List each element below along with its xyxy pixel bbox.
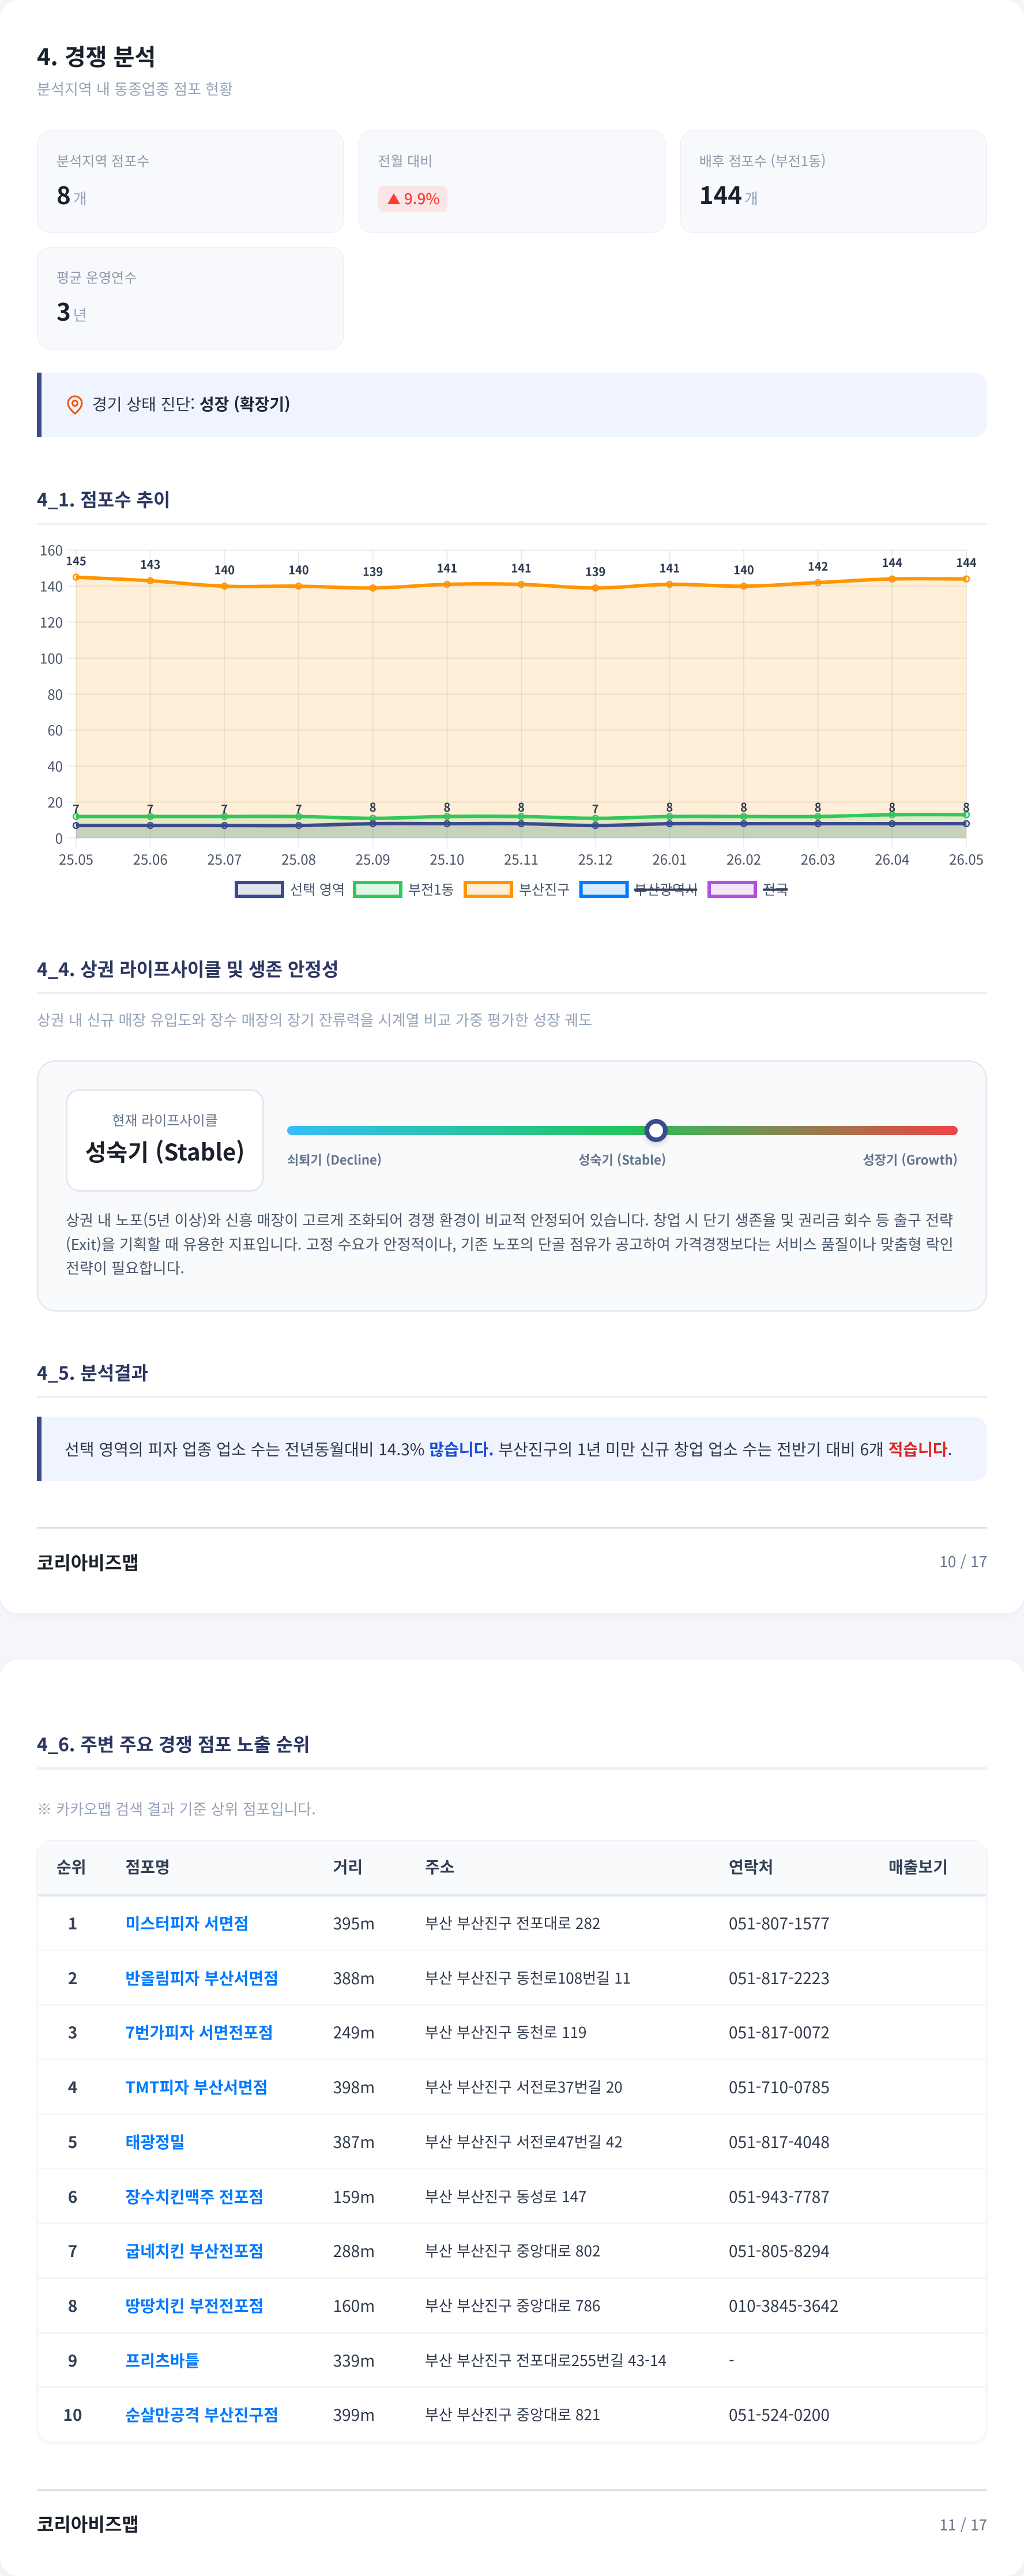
callout: analysis result: 선택 영역의 피자 업종 업소 수는 전년동월대비 14.3% 많습니다. 부산진구의 1년 미만 신규 창업 업소 수는 전반기 대비 6개 적습니다. (65, 1437, 952, 1460)
row 9: 부산 부산진구 전포대로255번길 43-14 (425, 2349, 667, 2371)
row 8: 010-3845-3642 (729, 2294, 838, 2317)
stat card: average years: 3년 (57, 293, 87, 328)
page number: 10 / 17 (940, 1550, 987, 1572)
y axis labels: 40 (47, 756, 63, 776)
data labels: 8 (666, 798, 673, 815)
table header: 순위 (57, 1855, 86, 1878)
row 7: 부산 부산진구 중앙대로 802 (425, 2240, 600, 2261)
y axis labels: 0 (55, 827, 63, 848)
badge: change: 9.9% (404, 187, 440, 209)
x axis labels: 25.09 (356, 848, 390, 869)
row 2: 반올림피자 부산서면점 (126, 1966, 278, 1989)
row 8: 땅땅치킨 부전전포점 (126, 2294, 263, 2317)
panel: lifecycle (37, 1060, 987, 1312)
current lifecycle box: 성숙기 (Stable) (85, 1134, 244, 1167)
row 6 (38, 2170, 986, 2224)
table: competitor ranking (37, 1840, 987, 2443)
row 4: 부산 부산진구 서전로37번길 20 (425, 2076, 623, 2097)
stat card: background stores (680, 130, 987, 233)
data labels: 8 (443, 798, 450, 815)
x axis labels: 26.02 (726, 848, 761, 869)
table header: 매출보기 (889, 1855, 948, 1878)
row 1: 051-807-1577 (729, 1912, 830, 1935)
data labels: 8 (889, 798, 895, 815)
legend: 전국 (763, 878, 788, 899)
data labels: 139 (363, 563, 383, 579)
row 8: 8 (68, 2294, 77, 2317)
series: bujeon 1-dong (73, 812, 969, 838)
y axis labels (40, 539, 63, 848)
badge: change (378, 186, 447, 212)
stat card: store count (37, 130, 344, 233)
series: busanjin-gu (73, 574, 969, 838)
data labels: 8 (740, 798, 747, 815)
y axis labels: 160 (40, 539, 63, 559)
row 1: 1 (68, 1912, 77, 1935)
heading: 4_6 (37, 1729, 987, 1770)
data labels: 144 (956, 554, 977, 570)
description: lifecycle: 상권 내 신규 매장 유입도와 장수 매장의 장기 잔류력을 시계열 비교 가중 평가한 성장 궤도 (37, 1009, 592, 1030)
legend (236, 878, 788, 899)
data labels: 7 (592, 800, 599, 817)
row 6: 6 (68, 2185, 77, 2208)
x axis labels: 25.11 (504, 848, 539, 869)
row 5: 태광정밀 (126, 2130, 185, 2153)
data labels: 7 (147, 800, 154, 817)
row 3: 249m (333, 2021, 375, 2044)
row 3 (38, 2006, 986, 2060)
table header: 거리 (333, 1855, 363, 1878)
stat card: store count: 분석지역 점포수 (57, 150, 149, 170)
data labels: 8 (815, 798, 822, 815)
legend: 선택 영역 (290, 878, 345, 899)
row 10 (63, 2403, 830, 2426)
note: ※ 카카오맵 검색 결과 기준 상위 점포입니다. (37, 1798, 316, 1819)
data labels: 143 (140, 555, 160, 572)
row 10: 순살만공격 부산진구점 (126, 2403, 278, 2426)
heading: 4_1: 4_1. 점포수 추이 (37, 486, 170, 512)
data labels: 145 (66, 552, 86, 569)
row 3: 051-817-0072 (729, 2021, 830, 2044)
data labels: 7 (221, 800, 228, 817)
lifecycle description: 상권 내 노포(5년 이상)와 신흥 매장이 고르게 조화되어 경쟁 환경이 비교적 안정되어 있습니다. 창업 시 단기 생존율 및 권리금 회수 등 출구 전략 (66, 1209, 953, 1230)
data labels: 7 (295, 800, 302, 817)
row 1: 395m (333, 1912, 375, 1935)
x axis labels: 25.08 (281, 848, 316, 869)
gradient lifecycle bar (287, 1126, 958, 1135)
row 10: 051-524-0200 (729, 2403, 830, 2426)
series: selected area (73, 821, 969, 838)
callout: economic diagnosis (37, 373, 987, 437)
row 5: 051-817-4048 (729, 2130, 830, 2153)
stat card: average years (37, 247, 344, 350)
row 7 (38, 2224, 986, 2279)
heading: 4_5 (37, 1358, 987, 1398)
heading: 4_1 (37, 485, 987, 525)
page number: 11 / 17 (940, 2514, 987, 2535)
stat card: background stores: 144개 (699, 177, 758, 212)
row 2: 부산 부산진구 동천로108번길 11 (425, 1967, 631, 1988)
heading: 4_5: 4_5. 분석결과 (37, 1359, 148, 1385)
row 1 (38, 1897, 986, 1951)
y axis labels: 140 (40, 576, 63, 596)
table header: 연락처 (729, 1855, 773, 1878)
stat card: month over month (358, 130, 666, 233)
row 5 (38, 2115, 986, 2169)
panel: page 10 competition analysis (0, 0, 1024, 1613)
footer brand: 코리아비즈맵 (37, 1549, 139, 1575)
row 4 (38, 2060, 986, 2115)
data labels: 139 (585, 563, 605, 579)
row 3: 7번가피자 서면전포점 (126, 2021, 273, 2044)
row 10: 10 (63, 2403, 82, 2426)
bar labels: 쇠퇴기 (Decline) (287, 1150, 382, 1169)
current lifecycle box: 현재 라이프사이클 (112, 1109, 218, 1129)
y axis labels: 100 (40, 647, 63, 668)
data labels: 7 (73, 800, 80, 817)
row 7: 7 (68, 2239, 77, 2262)
data labels: 140 (288, 561, 309, 578)
title: 4. 경쟁 분석 (37, 39, 156, 72)
stat card: store count: 8개 (57, 177, 87, 212)
row 7: 288m (333, 2239, 375, 2262)
row 4: TMT피자 부산서면점 (126, 2075, 268, 2098)
data labels: 8 (518, 798, 525, 815)
heading: 4_4 (37, 954, 987, 994)
row 8: 부산 부산진구 중앙대로 786 (425, 2295, 600, 2316)
row 9 (38, 2334, 986, 2388)
row 6: 부산 부산진구 동성로 147 (425, 2185, 586, 2207)
x axis labels: 25.12 (578, 848, 613, 869)
row 10: 부산 부산진구 중앙대로 821 (425, 2404, 600, 2425)
y axis labels: 120 (40, 611, 63, 632)
table header: 주소 (425, 1855, 455, 1878)
row 4: 4 (68, 2075, 77, 2098)
row 9: 프리츠바틀 (126, 2349, 199, 2372)
heading: 4_6: 4_6. 주변 주요 경쟁 점포 노출 순위 (37, 1730, 310, 1757)
row 2: 051-817-2223 (729, 1966, 830, 1989)
x axis labels: 26.01 (652, 848, 687, 869)
row 9: - (729, 2349, 735, 2372)
stat card: average years: 평균 운영연수 (57, 266, 137, 287)
row 5: 387m (333, 2130, 375, 2153)
data labels: 140 (214, 561, 235, 578)
row 3: 3 (68, 2021, 77, 2044)
row 9: 9 (68, 2349, 77, 2372)
data labels: 142 (808, 557, 828, 574)
footer rule (37, 1527, 987, 1529)
legend: 부산광역시 (634, 878, 698, 899)
data labels: 141 (437, 559, 457, 576)
row 6: 159m (333, 2185, 375, 2208)
data labels: 144 (882, 554, 902, 570)
x axis labels: 25.07 (207, 848, 242, 869)
data labels: 141 (660, 559, 680, 576)
row 2: 388m (333, 1966, 375, 1989)
y axis labels: 80 (47, 684, 63, 704)
row 4: 051-710-0785 (729, 2075, 830, 2098)
data labels: 8 (370, 798, 377, 815)
icon: map pin (67, 396, 83, 415)
lifecycle description: (Exit)을 기획할 때 유용한 지표입니다. 고정 수요가 안정적이나, 기존 노포의 단골 점유가 공고하여 가격경쟁보다는 서비스 품질이나 맞춤형 락인 (66, 1233, 954, 1255)
row 7: 굽네치킨 부산전포점 (126, 2239, 263, 2262)
footer rule (37, 2489, 987, 2491)
row 8 (38, 2279, 986, 2334)
row 4: 398m (333, 2075, 375, 2098)
data labels: 141 (511, 559, 532, 576)
row 1: 미스터피자 서면점 (126, 1912, 249, 1935)
data labels (66, 552, 977, 817)
y axis labels: 60 (47, 719, 63, 739)
data labels: 8 (963, 798, 970, 815)
x axis labels: 25.05 (59, 848, 93, 869)
row 10: 399m (333, 2403, 375, 2426)
row 6: 장수치킨맥주 전포점 (126, 2185, 263, 2208)
row 5: 부산 부산진구 서전로47번길 42 (425, 2131, 623, 2152)
subtitle: 분석지역 내 동종업종 점포 현황 (37, 78, 233, 99)
x axis labels: 26.04 (875, 848, 909, 869)
current lifecycle box (66, 1089, 264, 1192)
callout: economic diagnosis: 경기 상태 진단: 성장 (확장기) (92, 392, 291, 415)
bar labels (287, 1150, 958, 1169)
footer brand: 코리아비즈맵 (37, 2510, 139, 2537)
bar labels: 성숙기 (Stable) (578, 1150, 666, 1169)
row 2: 2 (68, 1966, 77, 1989)
row 7: 051-805-8294 (729, 2239, 830, 2262)
lifecycle description (66, 1209, 954, 1278)
heading: 4_4: 4_4. 상권 라이프사이클 및 생존 안정성 (37, 955, 338, 982)
x axis labels: 25.10 (430, 848, 464, 869)
marker (645, 1119, 668, 1142)
row 9: 339m (333, 2349, 375, 2372)
lifecycle description: 전략이 필요합니다. (66, 1257, 185, 1278)
table header (38, 1841, 986, 1897)
row 5: 5 (68, 2130, 77, 2153)
panel: page 11 nearby competitors (0, 1659, 1024, 2576)
data labels: 140 (733, 561, 754, 578)
x axis labels: 26.03 (801, 848, 835, 869)
bar labels: 성장기 (Growth) (863, 1150, 958, 1169)
x axis labels: 25.06 (133, 848, 168, 869)
legend: 부산진구 (519, 878, 570, 899)
stat card: month over month: 전월 대비 (378, 150, 432, 170)
row 3: 부산 부산진구 동천로 119 (425, 2021, 586, 2042)
callout: analysis result (37, 1417, 987, 1481)
legend: 부전1동 (408, 878, 454, 899)
line chart: store count trend (40, 539, 984, 899)
table header: 점포명 (126, 1855, 170, 1878)
row 1: 부산 부산진구 전포대로 282 (425, 1912, 600, 1933)
row 2 (38, 1951, 986, 2006)
stat card: background stores: 배후 점포수 (부전1동) (699, 150, 826, 170)
y axis labels: 20 (47, 791, 63, 812)
x axis labels: 26.05 (949, 848, 984, 869)
row 8: 160m (333, 2294, 375, 2317)
row 6: 051-943-7787 (729, 2185, 830, 2208)
x axis labels (59, 848, 984, 869)
